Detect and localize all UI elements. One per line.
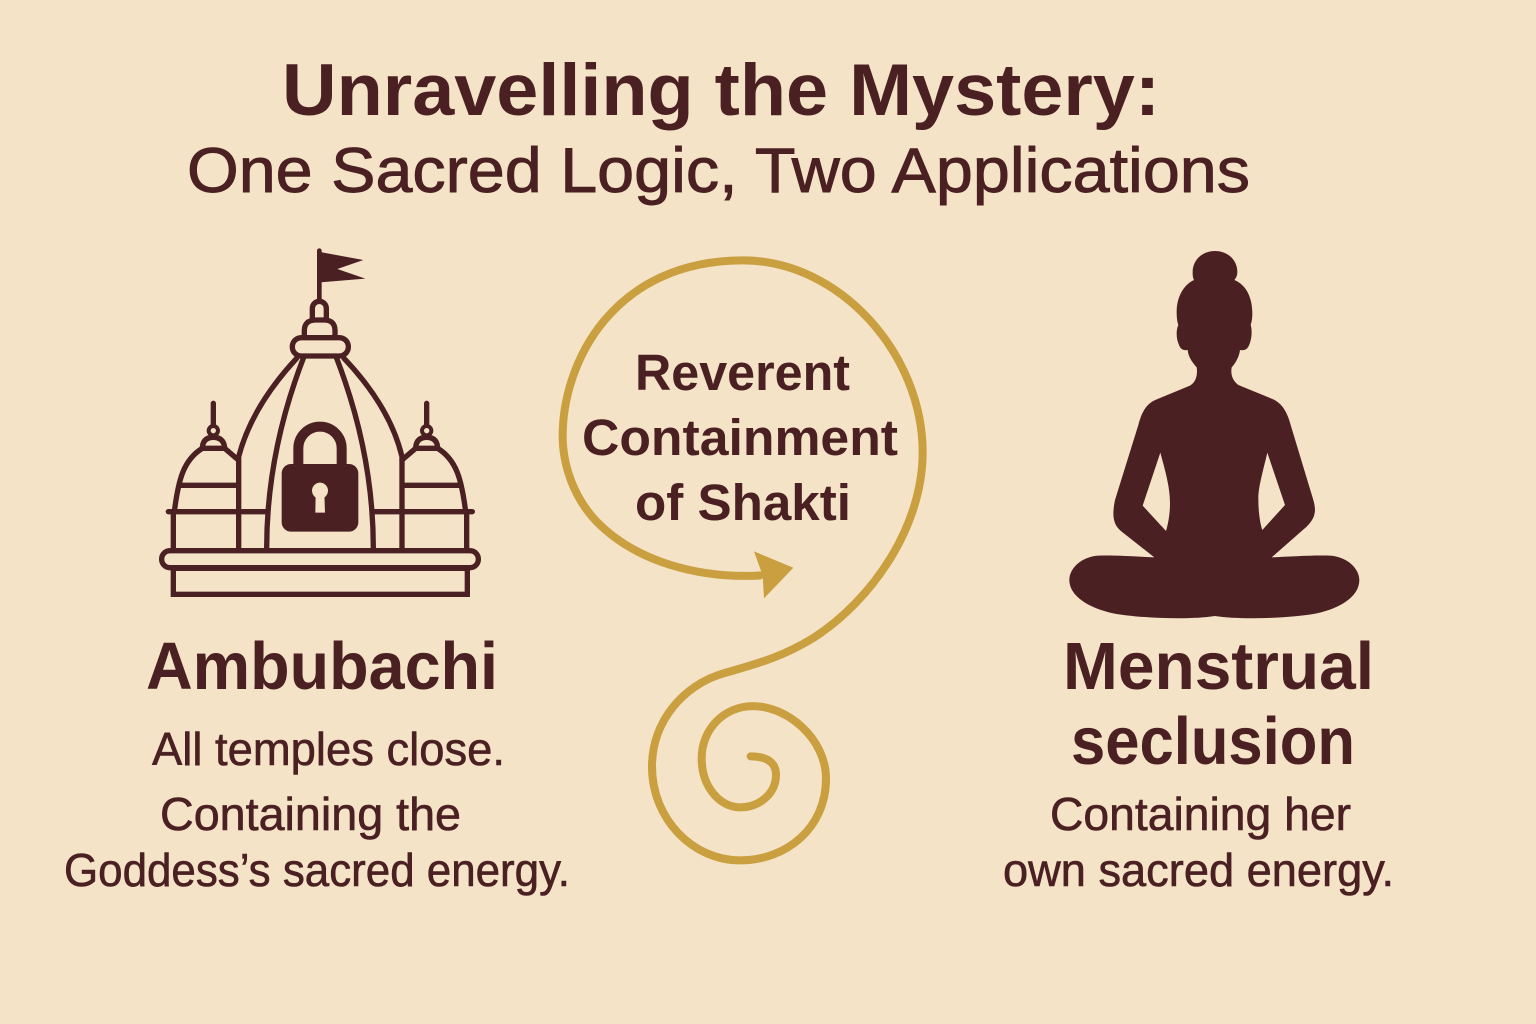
text block: Ambubachi description: Goddess’s sacred energy. xyxy=(64,844,570,896)
panel: Ambubachi xyxy=(64,251,570,896)
arrow: golden spiral xyxy=(563,260,923,860)
heading: Menstrual seclusion xyxy=(1063,629,1374,779)
title: Unravelling the Mystery: xyxy=(282,50,1160,131)
subtitle: One Sacred Logic, Two Applications xyxy=(187,136,1250,206)
text block: Reverent Containment of Shakti: of Shakti xyxy=(635,474,851,531)
heading: Ambubachi: Ambubachi xyxy=(146,629,498,704)
panel: central spiral xyxy=(563,260,923,860)
text block: Ambubachi description: All temples close. xyxy=(152,723,505,775)
text block: Ambubachi description: Containing the xyxy=(160,788,461,840)
title block xyxy=(187,50,1250,206)
text block: Ambubachi description xyxy=(64,723,570,896)
icon: meditating woman silhouette xyxy=(1069,251,1359,618)
text block: Menstrual seclusion description: Containing her xyxy=(1050,788,1351,840)
text block: Reverent Containment of Shakti: Containment xyxy=(582,409,898,466)
text block: Reverent Containment of Shakti: Reverent xyxy=(635,344,850,401)
text block: Menstrual seclusion description: own sacred energy. xyxy=(1003,844,1394,896)
text block: Menstrual seclusion description xyxy=(1003,788,1394,896)
text block: Reverent Containment of Shakti xyxy=(582,344,898,531)
icon: temple with padlock xyxy=(162,251,478,594)
heading: Menstrual seclusion: Menstrual xyxy=(1063,629,1374,704)
panel: Menstrual seclusion xyxy=(1003,251,1394,896)
heading: Menstrual seclusion: seclusion xyxy=(1071,704,1355,779)
